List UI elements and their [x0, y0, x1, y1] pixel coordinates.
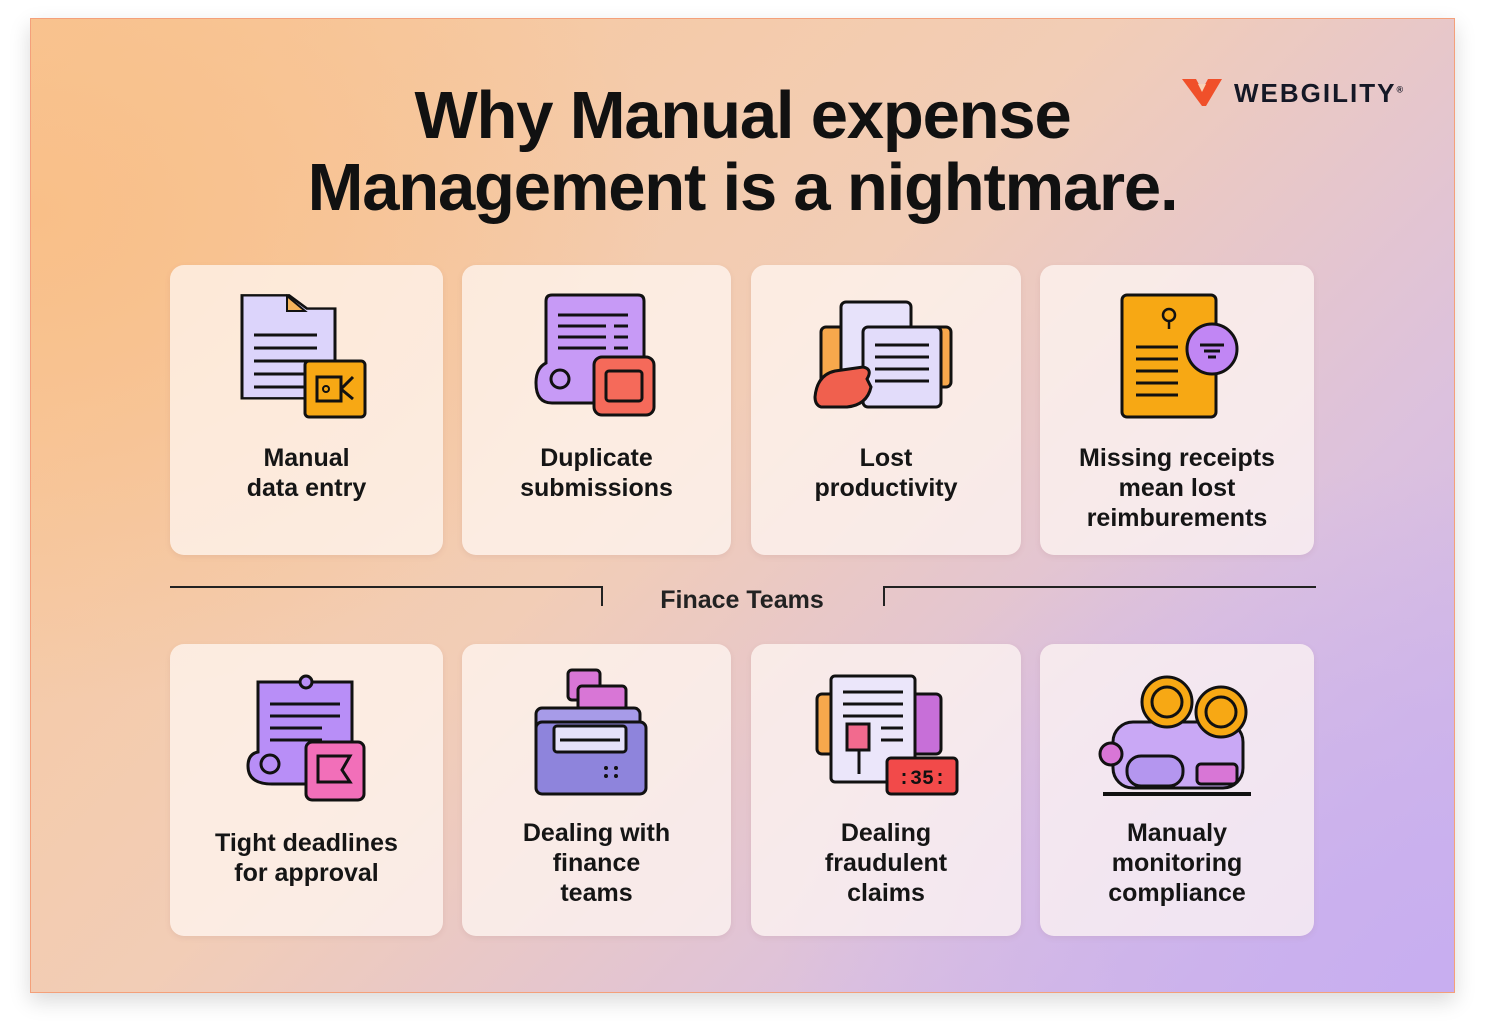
- logo: WEBGILITY®: [1234, 78, 1405, 108]
- card: missing receipts: [1040, 265, 1314, 555]
- card: fraudulent claims: [751, 644, 1021, 936]
- card: dealing with finance teams: [462, 644, 731, 936]
- card: lost productivity: productivity: [814, 474, 958, 502]
- card: compliance: compliance: [1108, 879, 1246, 907]
- card: duplicate submissions: [462, 265, 731, 555]
- divider: finance teams: [170, 586, 1316, 614]
- card: manual data entry: data entry: [247, 474, 366, 502]
- card: tight deadlines: [170, 644, 443, 936]
- card: fraudulent claims: Dealing: [841, 819, 931, 847]
- card: missing receipts: Missing receipts: [1079, 444, 1275, 472]
- card: compliance: [1040, 644, 1314, 936]
- card: dealing with finance teams: Dealing with: [523, 819, 670, 847]
- card: lost productivity: Lost: [860, 444, 912, 472]
- card: duplicate submissions: Duplicate: [540, 444, 653, 472]
- card: fraudulent claims: fraudulent: [825, 849, 947, 877]
- card: compliance: Manualy: [1127, 819, 1227, 847]
- card: lost productivity: [751, 265, 1021, 555]
- card: missing receipts: reimburements: [1087, 504, 1267, 532]
- card: fraudulent claims: claims: [847, 879, 925, 907]
- card: manual data entry: Manual: [263, 444, 350, 472]
- card: tight deadlines: for approval: [234, 859, 379, 887]
- card: duplicate submissions: submissions: [520, 474, 673, 502]
- card: fraudulent claims: :35:: [898, 768, 946, 791]
- title: Why Manual expense: [414, 78, 1071, 153]
- title: Management is a nightmare.: [308, 150, 1177, 225]
- card: dealing with finance teams: finance: [553, 849, 640, 877]
- card: dealing with finance teams: teams: [560, 879, 633, 907]
- title: [308, 78, 1177, 225]
- card: tight deadlines: Tight deadlines: [215, 829, 398, 857]
- card: manual data entry: [170, 265, 443, 555]
- card: compliance: monitoring: [1112, 849, 1242, 877]
- card: missing receipts: mean lost: [1119, 474, 1235, 502]
- divider: finance teams: Finace Teams: [660, 586, 824, 614]
